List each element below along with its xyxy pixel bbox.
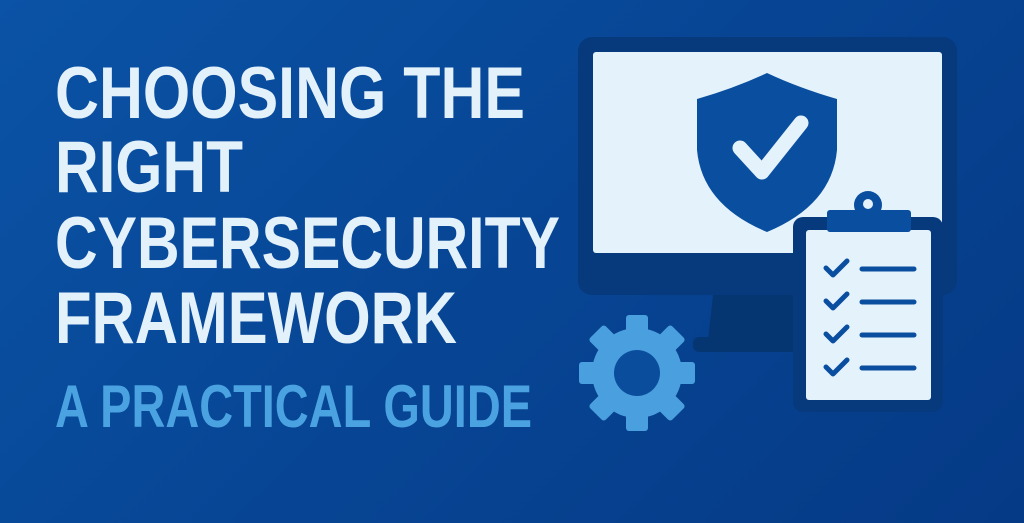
title: CHOOSING THE bbox=[55, 53, 525, 134]
title: FRAMEWORK bbox=[55, 278, 457, 359]
title: RIGHT bbox=[55, 127, 243, 208]
icon: clipboard bbox=[793, 191, 943, 412]
icon: shield bbox=[697, 73, 837, 232]
title: CYBERSECURITY bbox=[55, 203, 560, 284]
subtitle: A PRACTICAL GUIDE bbox=[55, 373, 532, 440]
icon: gear bbox=[579, 315, 695, 431]
title bbox=[55, 53, 560, 359]
icon: monitor bbox=[578, 37, 957, 352]
